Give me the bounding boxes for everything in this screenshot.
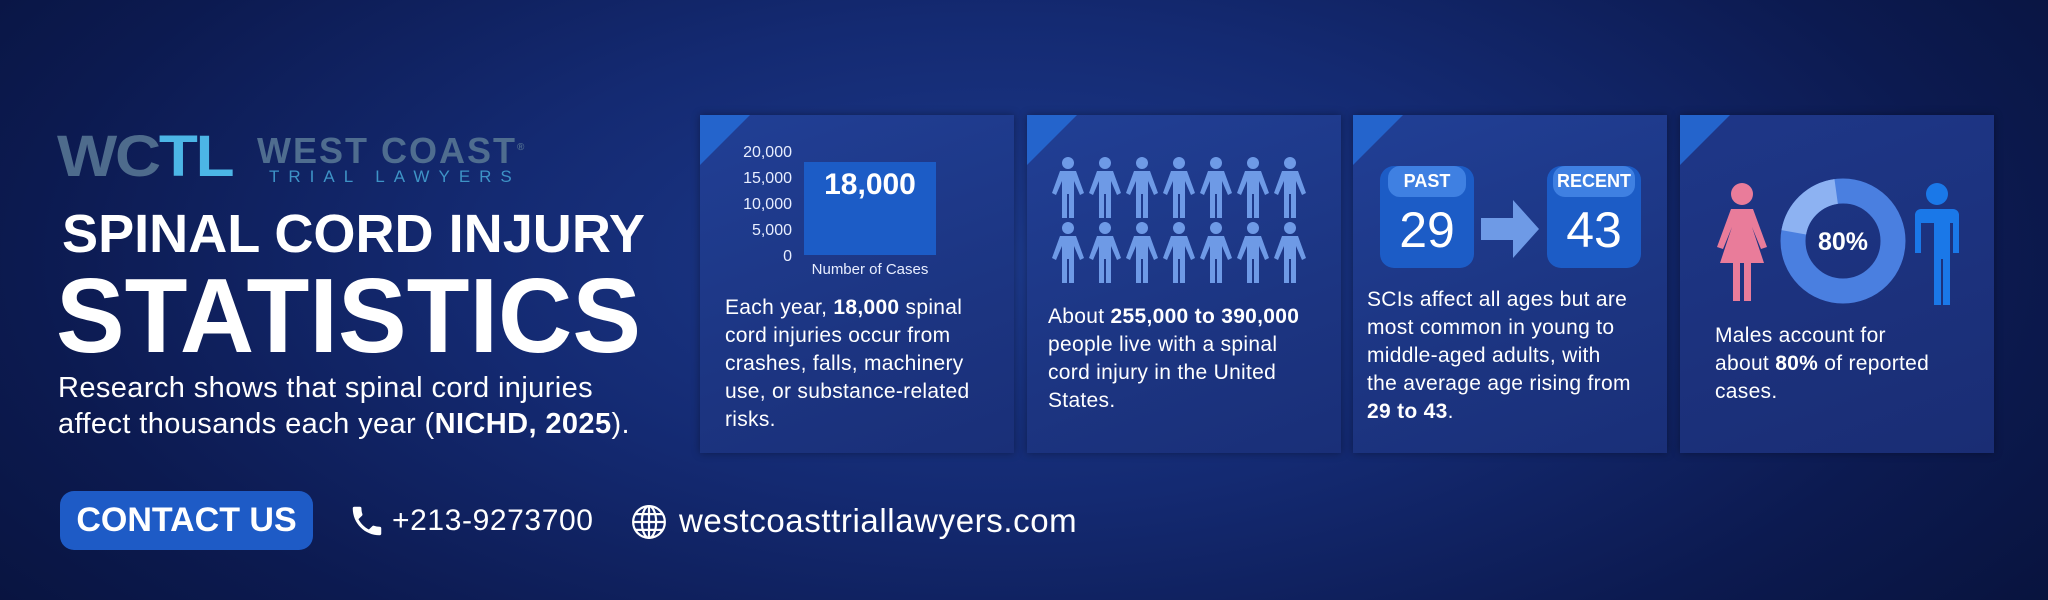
bar chart: 0 — [783, 248, 792, 265]
text: gender: about 80% of reported — [1715, 352, 1929, 375]
intro text: Research shows that spinal cord injuries — [58, 372, 593, 404]
panel: people living with SCI — [1027, 115, 1341, 453]
bar chart: 20,000 — [743, 144, 792, 161]
icon: people grid — [1052, 157, 1306, 283]
text: prevalence: cord injury in the United — [1048, 361, 1276, 384]
text: annual cases: Each year, 18,000 spinal — [725, 296, 962, 319]
text: age: the average age rising from — [1367, 372, 1631, 395]
bar chart: Number of Cases — [812, 261, 928, 278]
bar chart: 18,000 — [824, 168, 916, 201]
recent age box: 43 — [1566, 202, 1622, 258]
bar chart: 15,000 — [743, 170, 792, 187]
panel: gender — [1680, 115, 1994, 453]
donut chart — [1780, 178, 1906, 304]
text: prevalence — [1048, 305, 1299, 412]
recent age box — [1547, 166, 1641, 268]
text: prevalence: About 255,000 to 390,000 — [1048, 305, 1299, 328]
contact button — [60, 491, 313, 550]
text: annual cases: cord injuries occur from — [725, 324, 950, 347]
contact button: CONTACT US — [76, 501, 297, 539]
text: gender: cases. — [1715, 380, 1778, 403]
panel: age shift — [1353, 115, 1667, 453]
text: age: most common in young to — [1367, 316, 1614, 339]
website: westcoasttriallawyers.com — [679, 502, 1077, 539]
text: annual cases — [725, 296, 969, 431]
text: age: middle-aged adults, with — [1367, 344, 1601, 367]
past age box: 29 — [1399, 202, 1455, 258]
logo mark: WCTL: WCTL — [57, 124, 232, 189]
past age box: PAST — [1404, 171, 1450, 191]
intro text — [58, 372, 630, 440]
title — [56, 204, 645, 370]
text: prevalence: States. — [1048, 389, 1115, 412]
title: SPINAL CORD INJURY — [62, 204, 645, 264]
bar chart: 10,000 — [743, 196, 792, 213]
text: gender — [1715, 324, 1929, 403]
icon: globe — [632, 505, 666, 539]
icon: female — [1717, 183, 1767, 301]
logo text: TRIAL LAWYERS: TRIAL LAWYERS — [269, 167, 521, 186]
panel: annual cases chart — [700, 115, 1014, 453]
text: prevalence: people live with a spinal — [1048, 333, 1277, 356]
phone: +213-9273700 — [392, 504, 594, 537]
text: gender: Males account for — [1715, 324, 1886, 347]
intro text: affect thousands each year (NICHD, 2025). — [58, 408, 630, 440]
text: age — [1367, 288, 1631, 423]
recent age box: RECENT — [1557, 171, 1631, 191]
past age box — [1380, 166, 1474, 268]
icon: male — [1915, 183, 1959, 305]
bar chart — [743, 144, 936, 278]
text: annual cases: use, or substance-related — [725, 380, 969, 403]
icon: phone — [352, 506, 382, 536]
text: annual cases: crashes, falls, machinery — [725, 352, 964, 375]
arrow — [1481, 200, 1539, 258]
text: age: SCIs affect all ages but are — [1367, 288, 1627, 311]
logo — [57, 124, 526, 189]
bar chart: 5,000 — [752, 222, 792, 239]
text: age: 29 to 43. — [1367, 400, 1454, 423]
logo text: WEST COAST: WEST COAST® — [257, 130, 526, 171]
donut chart: 80% — [1818, 228, 1868, 256]
text: annual cases: risks. — [725, 408, 776, 431]
